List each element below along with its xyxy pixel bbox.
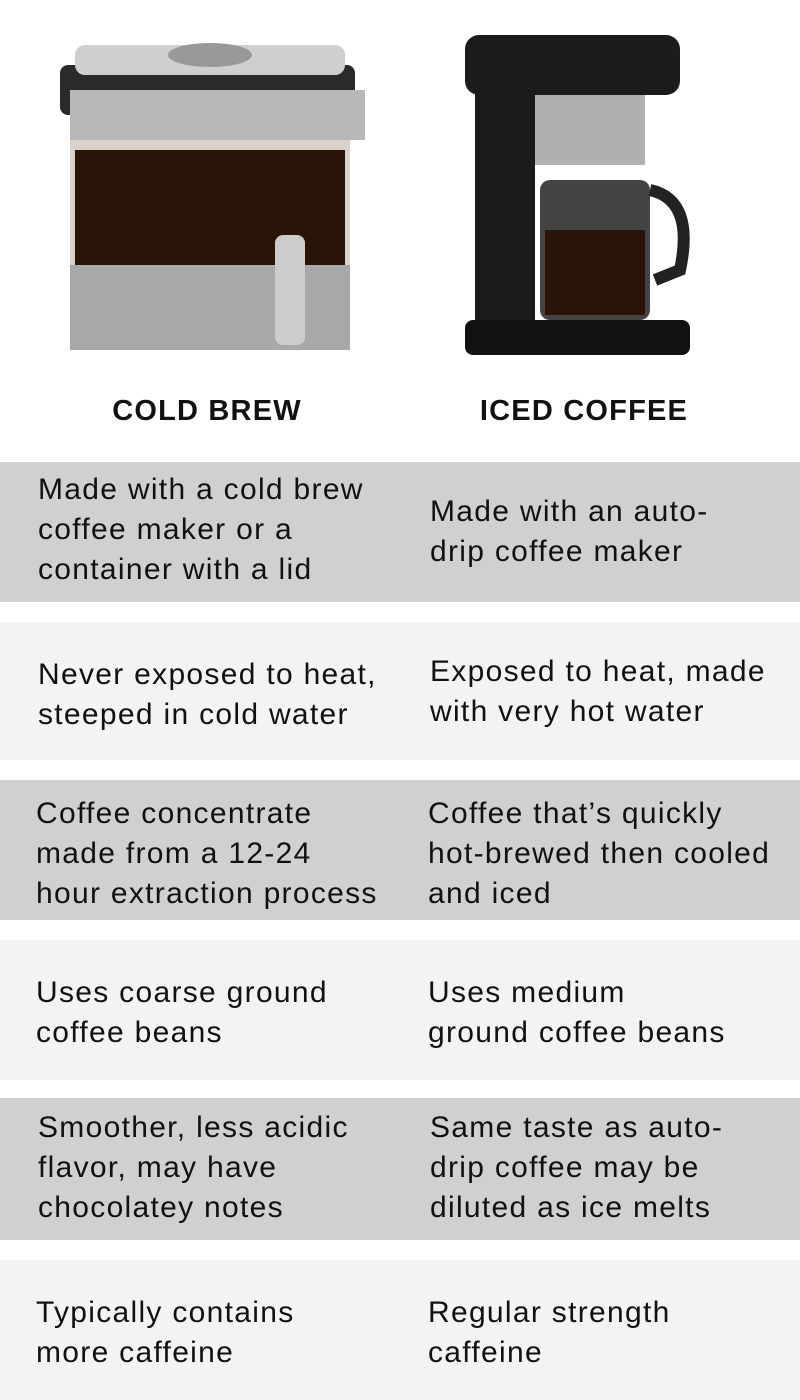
text: iced coffee row3: Coffee that’s quickly: [428, 797, 723, 830]
text: cold brew row5: [38, 1111, 349, 1224]
text: cold brew row5: flavor, may have: [38, 1151, 277, 1184]
text: cold brew row1: Made with a cold brew: [38, 473, 364, 506]
text: cold brew row1: container with a lid: [38, 553, 312, 586]
row 2: [0, 622, 800, 760]
text: cold brew row5: chocolatey notes: [38, 1191, 284, 1224]
text: cold brew row6: [36, 1296, 295, 1369]
text: iced coffee row2: Exposed to heat, made: [430, 655, 766, 688]
text: iced coffee row3: [428, 797, 770, 910]
text: iced coffee row5: Same taste as auto-: [430, 1111, 723, 1144]
text: iced coffee row3: hot-brewed then cooled: [428, 837, 770, 870]
text: cold brew row2: Never exposed to heat,: [38, 658, 377, 691]
text: cold brew row3: hour extraction process: [36, 877, 378, 910]
text: cold brew row6: Typically contains: [36, 1296, 295, 1329]
row 5: [0, 1098, 800, 1240]
text: cold brew row1: [38, 473, 364, 586]
heading: cold brew: COLD BREW: [112, 395, 302, 427]
text: cold brew row4: [36, 976, 328, 1049]
image: cold brew maker: [60, 43, 365, 350]
text: iced coffee row5: diluted as ice melts: [430, 1191, 711, 1224]
text: iced coffee row3: and iced: [428, 877, 552, 910]
heading: iced coffee: ICED COFFEE: [480, 395, 688, 427]
text: iced coffee row5: drip coffee may be: [430, 1151, 700, 1184]
text: iced coffee row1: drip coffee maker: [430, 535, 683, 568]
text: cold brew row2: [38, 658, 377, 731]
text: cold brew row5: Smoother, less acidic: [38, 1111, 349, 1144]
text: iced coffee row4: ground coffee beans: [428, 1016, 726, 1049]
text: cold brew row6: more caffeine: [36, 1336, 234, 1369]
row 1: [0, 462, 800, 602]
text: cold brew row4: coffee beans: [36, 1016, 223, 1049]
text: cold brew row3: [36, 797, 378, 910]
row 3: [0, 780, 800, 920]
image: iced coffee maker: [465, 35, 690, 355]
text: iced coffee row5: [430, 1111, 723, 1224]
text: cold brew row4: Uses coarse ground: [36, 976, 328, 1009]
text: iced coffee row1: Made with an auto-: [430, 495, 709, 528]
text: iced coffee row1: [430, 495, 709, 568]
text: cold brew row2: steeped in cold water: [38, 698, 349, 731]
text: cold brew row3: made from a 12-24: [36, 837, 312, 870]
text: iced coffee row6: caffeine: [428, 1336, 543, 1369]
text: iced coffee row6: Regular strength: [428, 1296, 671, 1329]
row 6: [0, 1260, 800, 1400]
text: iced coffee row4: [428, 976, 726, 1049]
text: iced coffee row4: Uses medium: [428, 976, 626, 1009]
text: iced coffee row6: [428, 1296, 671, 1369]
text: iced coffee row2: [430, 655, 766, 728]
text: cold brew row3: Coffee concentrate: [36, 797, 312, 830]
text: iced coffee row2: with very hot water: [430, 695, 705, 728]
text: cold brew row1: coffee maker or a: [38, 513, 293, 546]
row 4: [0, 940, 800, 1080]
